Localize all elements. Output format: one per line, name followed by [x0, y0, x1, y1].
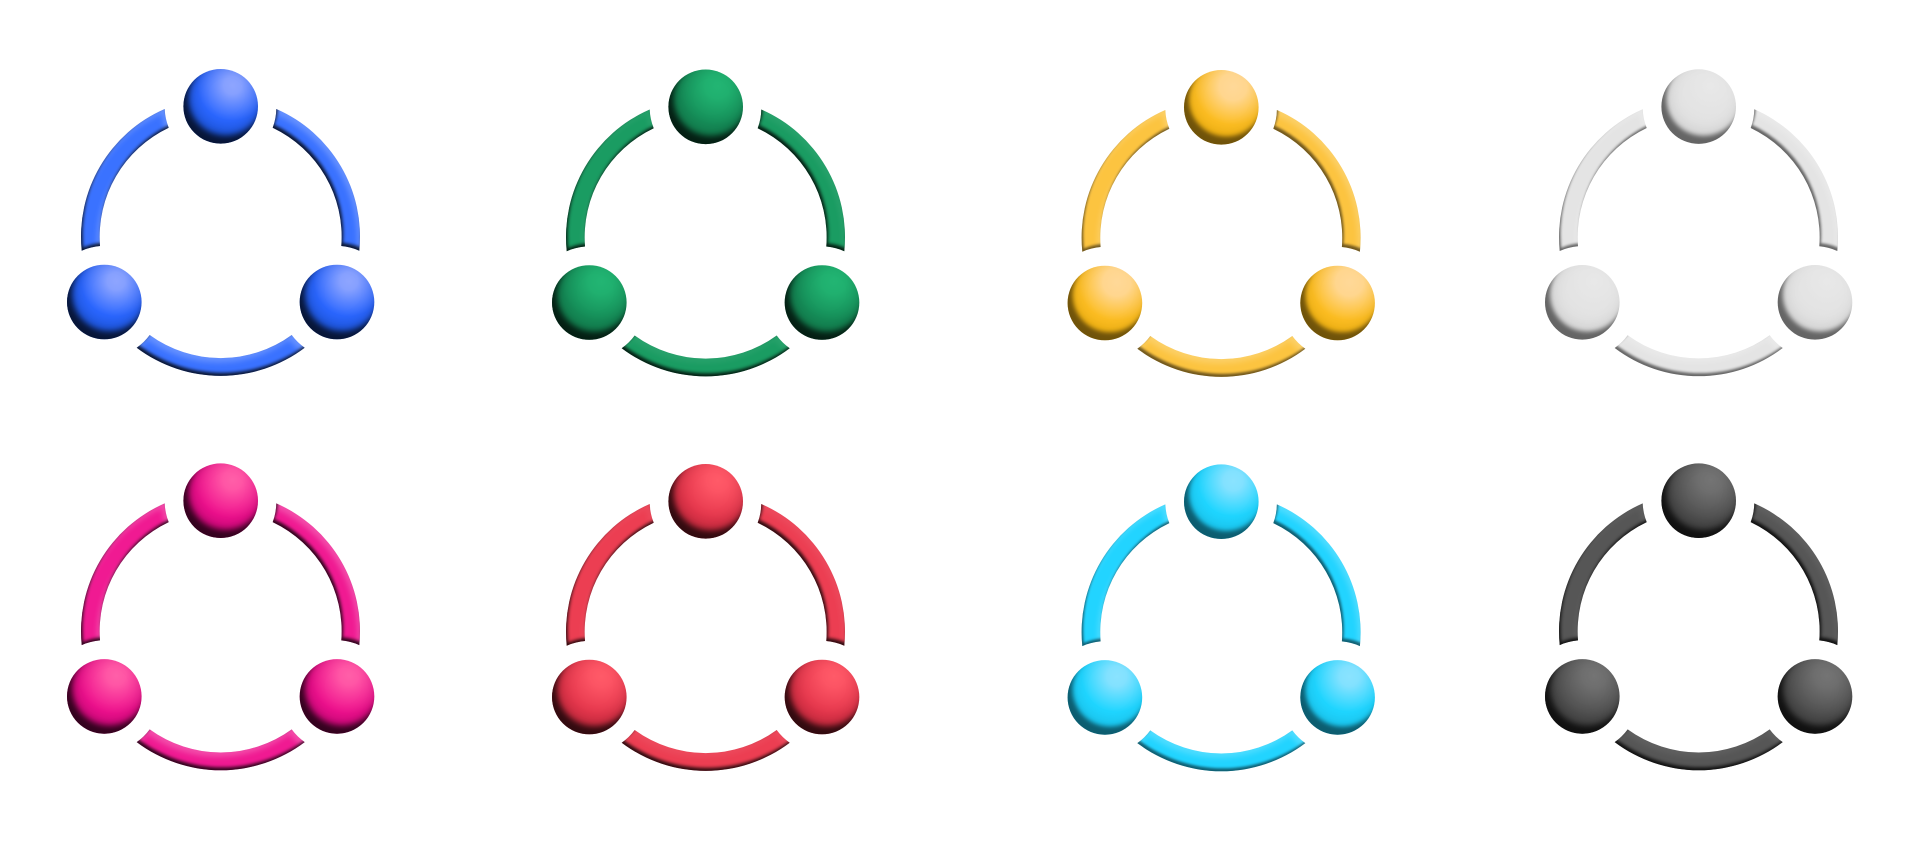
green arcs	[566, 110, 845, 376]
green spheres	[552, 70, 859, 340]
black arcs	[1559, 503, 1838, 770]
icon: white cycle	[1545, 69, 1852, 376]
yellow spheres	[1068, 70, 1375, 340]
icon: cyan cycle	[1068, 464, 1375, 771]
icon: red cycle	[552, 464, 859, 771]
icon: blue cycle	[67, 69, 374, 376]
yellow arcs	[1082, 110, 1361, 377]
red arcs	[566, 504, 845, 771]
white arcs	[1559, 109, 1838, 376]
blue arcs	[81, 109, 360, 376]
blue spheres	[67, 69, 374, 339]
white spheres	[1545, 69, 1852, 340]
icon: green cycle	[552, 70, 859, 376]
red spheres	[552, 464, 859, 734]
icon: black cycle	[1545, 463, 1852, 770]
cyan arcs	[1082, 504, 1361, 771]
pink spheres	[67, 463, 374, 734]
pink arcs	[81, 503, 360, 770]
icon: yellow cycle	[1068, 70, 1375, 377]
icon: pink cycle	[67, 463, 374, 770]
black spheres	[1545, 463, 1852, 734]
cyan spheres	[1068, 464, 1375, 735]
